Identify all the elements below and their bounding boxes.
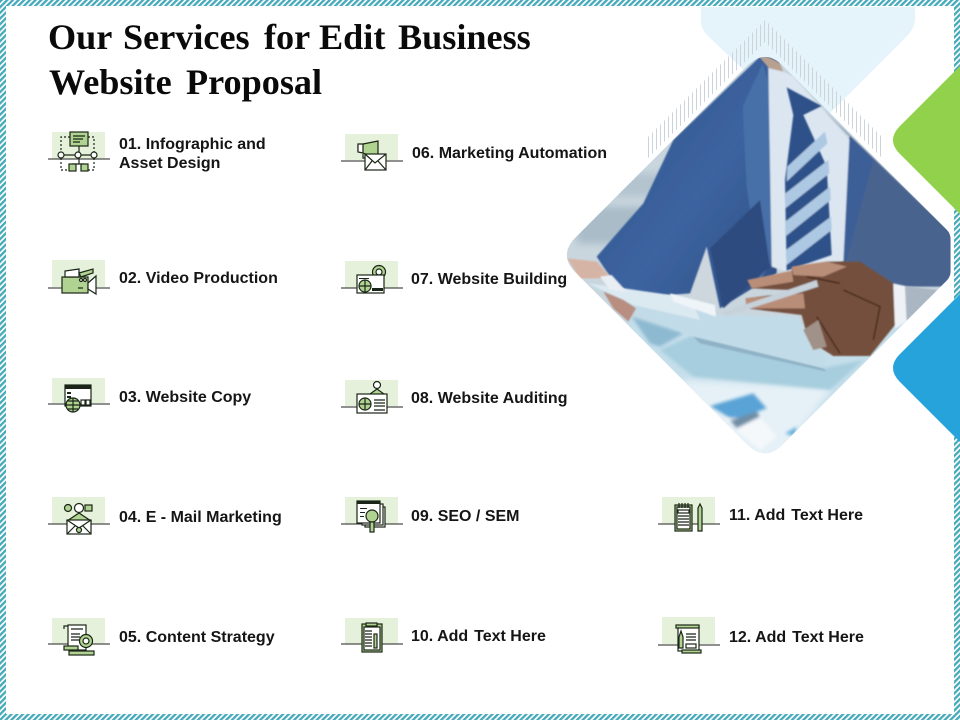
service 08: website auditing bbox=[341, 380, 567, 413]
icon: browser and gear bbox=[357, 266, 386, 293]
service 03: website copy bbox=[48, 378, 251, 412]
service 02: video production: 02. Video Production bbox=[119, 270, 278, 287]
title bbox=[48, 17, 531, 102]
blue corner shape bbox=[893, 294, 960, 442]
service 07: website building: 07. Website Building bbox=[411, 271, 567, 288]
photo: desk surfaces bbox=[632, 317, 863, 450]
service 02: video production bbox=[48, 260, 278, 294]
service 05: content strategy bbox=[48, 618, 275, 655]
photo: tablet bbox=[588, 283, 827, 372]
hatched chevron behind photo bbox=[648, 20, 882, 158]
service 05: content strategy: 05. Content Strategy bbox=[119, 629, 275, 646]
photo: right hand with pen bbox=[722, 262, 938, 356]
title: Our bbox=[48, 17, 112, 57]
service 01: infographic and asset design: Asset Design bbox=[119, 155, 220, 172]
icon: notepad and pencil bbox=[675, 503, 702, 531]
icon: documents and magnifier bbox=[357, 501, 385, 532]
icon: megaphone and envelope bbox=[358, 141, 386, 170]
service 08: website auditing: 08. Website Auditing bbox=[411, 390, 567, 407]
photo: striped tie bbox=[785, 87, 832, 271]
green corner shape bbox=[893, 66, 960, 214]
service 04: e-mail marketing: 04. E - Mail Marketing bbox=[119, 509, 282, 526]
icon: browser and globe bbox=[65, 385, 91, 412]
service 01: infographic and asset design bbox=[48, 132, 266, 172]
icon: person in envelope bbox=[64, 504, 92, 534]
photo: businessman with tablet bbox=[557, 47, 957, 467]
service 09: SEO / SEM: 09. SEO / SEM bbox=[411, 508, 519, 525]
service 12: add text here bbox=[658, 617, 864, 653]
title: Business bbox=[398, 17, 531, 57]
service 03: website copy: 03. Website Copy bbox=[119, 389, 251, 406]
title: Services bbox=[123, 17, 250, 57]
service 10: add text here bbox=[341, 618, 546, 652]
service 11: add text here: 11. Add Text Here bbox=[729, 507, 863, 524]
title: Edit bbox=[319, 17, 385, 57]
service 06: marketing automation: 06. Marketing Automation bbox=[412, 145, 607, 162]
title: Proposal bbox=[186, 62, 322, 102]
service 01: infographic and asset design: 01. Infographic and bbox=[119, 136, 266, 153]
title: for bbox=[264, 17, 310, 57]
icon: video camera bbox=[62, 269, 96, 294]
title: Website bbox=[49, 62, 172, 102]
service 06: marketing automation bbox=[341, 134, 607, 170]
service 11: add text here bbox=[658, 497, 863, 531]
photo: shirt and jacket bbox=[597, 57, 952, 308]
service 10: add text here: 10. Add Text Here bbox=[411, 628, 546, 645]
service 04: e-mail marketing bbox=[48, 497, 282, 534]
service 09: SEO / SEM bbox=[341, 497, 519, 532]
icon: clipboard and pencil bbox=[362, 623, 382, 652]
service 07: website building bbox=[341, 261, 567, 293]
icon: scroll with pencil bbox=[676, 625, 701, 653]
icon: flow chart bbox=[58, 132, 97, 171]
icon: browser and auditor bbox=[357, 382, 387, 413]
service 12: add text here: 12. Add Text Here bbox=[729, 629, 864, 646]
pale blue background diamond bbox=[701, 7, 915, 133]
photo: left hand bbox=[567, 258, 636, 322]
icon: scroll and gear bbox=[64, 625, 94, 655]
